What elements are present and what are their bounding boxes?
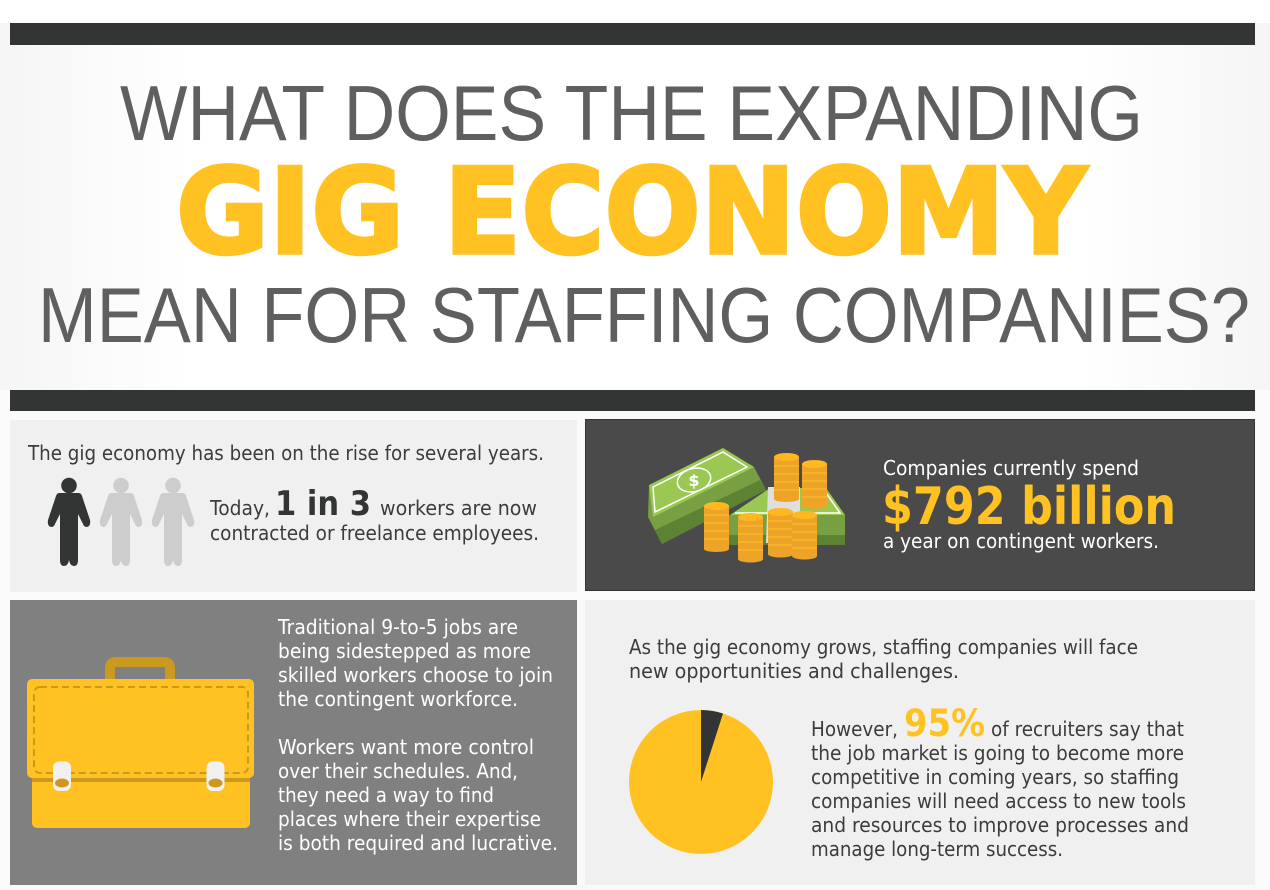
one in three statistic: Today, [209,496,270,520]
intro text [629,635,1138,683]
icon: grey person [100,478,142,566]
panel: contingent spend [586,420,1254,590]
flap stitching [34,687,248,773]
icon: money and coins [648,448,845,562]
text: traditional jobs [277,615,558,855]
text: traditional jobs: Workers want more control [278,735,534,759]
briefcase handle [110,662,170,682]
banknote stack right [729,487,845,545]
icon: briefcase [27,662,254,828]
recruiters statistic: companies will need access to new tools [811,789,1186,813]
icon: grey person [152,478,194,566]
title line 1: WHAT DOES THE EXPANDING [120,71,1143,157]
coin stack [792,511,817,560]
one in three statistic: workers are now [380,496,537,520]
text: traditional jobs: is both required and lucrative. [278,831,558,855]
coin stack [802,460,827,509]
paper band [766,487,800,543]
lower dark bar [10,390,1255,411]
right clasp [206,762,224,791]
coin stack [768,508,793,558]
text: traditional jobs: the contingent workforce. [278,687,518,711]
title line 2: gig economy: GIG ECONOMY [176,144,1089,282]
left clasp [53,762,71,791]
recruiters statistic: and resources to improve processes and [811,813,1189,837]
text: traditional jobs: being sidestepped as more [278,639,531,663]
recruiters statistic: of recruiters say that [991,717,1184,741]
title [38,71,1250,359]
briefcase body [32,770,250,828]
intro text: new opportunities and challenges. [629,659,959,683]
coin stack [704,502,729,552]
intro sentence: The gig economy has been on the rise for several years. [27,441,544,465]
recruiters statistic: competitive in coming years, so staffing [811,765,1179,789]
panel: opportunities and challenges [585,600,1255,885]
text: traditional jobs: skilled workers choose to join [278,663,553,687]
briefcase flap [27,679,254,778]
text: traditional jobs: Traditional 9-to-5 jobs are [277,615,518,639]
banknote stack left [648,448,766,544]
icon: dark person [48,478,90,566]
coin stack [774,453,799,502]
one in three statistic: 1 in 3 [275,484,371,524]
text: traditional jobs: over their schedules. And, [278,759,518,783]
text: traditional jobs: places where their expertise [278,807,541,831]
spend statistic: $792 billion [882,477,1176,537]
one in three statistic [209,484,539,545]
spend statistic: Companies currently spend [883,456,1139,480]
recruiters statistic: 95% [904,702,985,745]
dollar sign on note: $ [688,471,700,490]
recruiters statistic: the job market is going to become more [811,741,1184,765]
one in three statistic: contracted or freelance employees. [210,521,539,545]
spend statistic: a year on contingent workers. [883,529,1159,553]
text: traditional jobs: they need a way to find [278,783,494,807]
intro text: As the gig economy grows, staffing companies will face [629,635,1138,659]
top dark bar [10,23,1255,45]
pie chart: 95 percent [629,710,773,854]
spend statistic [882,456,1176,553]
icon: three people [48,478,194,566]
coin stacks [704,453,827,562]
recruiters statistic: However, [811,717,898,741]
panel: traditional jobs [10,600,577,885]
recruiters statistic: manage long-term success. [811,837,1063,861]
coin stack [738,513,763,562]
recruiters statistic [811,702,1189,861]
panel: one in three workers [10,420,577,592]
